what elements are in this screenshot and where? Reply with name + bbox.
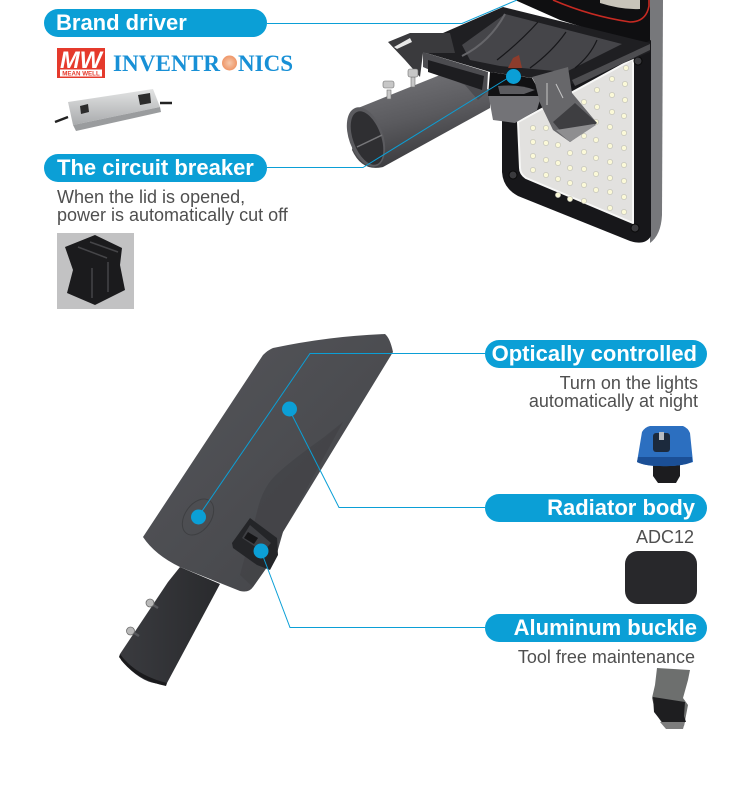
leader: radiator body: [289, 409, 485, 508]
pole mouth: [119, 654, 167, 686]
brand logo: Mean Well: MW: [60, 47, 104, 74]
heading: Brand driver: Brand driver: [56, 10, 187, 35]
open lid: [423, 7, 650, 84]
breaker box: [488, 93, 542, 123]
text: circuit breaker description: [57, 187, 288, 225]
leader: circuit breaker: [267, 78, 508, 168]
pole: [120, 567, 220, 684]
text: circuit breaker description: power is automatically cut off: [57, 205, 288, 225]
text: aluminum buckle description: Tool free maintenance: [518, 647, 695, 667]
ADC12 material swatch: [625, 551, 697, 604]
buckle icon: [652, 668, 690, 729]
brand logo: Inventronics: NICS: [238, 51, 293, 76]
lid lower rim: [572, 44, 650, 86]
LED panel: [518, 59, 633, 223]
lid ties: [462, 14, 597, 68]
heading: Aluminum buckle: Aluminum buckle: [514, 615, 697, 640]
marker dot: body: [282, 402, 297, 416]
marker dot: buckle: [254, 544, 268, 558]
heading: The circuit breaker: The circuit breaker: [57, 155, 254, 180]
text: ADC12: ADC12: [636, 527, 694, 547]
text: optically controlled description: automatically at night: [529, 391, 698, 411]
pipe mouth: [339, 102, 393, 172]
pole bolts: [126, 599, 158, 636]
open lamp photo: [267, 0, 663, 243]
lid interior: [462, 14, 622, 72]
pole lamp back view: [119, 334, 393, 686]
brand logo: Inventronics: [113, 51, 293, 76]
red wire and driver: [553, 0, 649, 22]
buckle on lamp: [232, 518, 278, 570]
body crease shading: [240, 422, 343, 587]
heading: Optically controlled: Optically controlled: [492, 341, 697, 366]
text: optically controlled description: [529, 373, 698, 411]
photocell icon: [637, 426, 693, 483]
driver photo: [55, 89, 172, 131]
heading: Radiator body: [485, 494, 707, 522]
sensor recess: [176, 493, 220, 541]
text: circuit breaker description: When the lid is opened,: [57, 187, 245, 207]
heading: Radiator body: Radiator body: [547, 495, 695, 520]
lamp black frame: [502, 40, 651, 243]
marker dot: [506, 69, 521, 84]
upper black compartment: [515, 0, 650, 48]
text: optically controlled description: Turn on the lights: [560, 373, 698, 393]
leader: optically controlled: [198, 354, 485, 517]
buckle: [532, 67, 597, 142]
marker dot: sensor: [191, 510, 206, 524]
lamp housing side strip: [650, 0, 663, 243]
heading: Brand driver: [44, 9, 267, 37]
brand logo: Mean Well: MEAN WELL: [62, 70, 100, 78]
bolts: [383, 69, 418, 99]
frame screws: [509, 57, 642, 232]
breaker photo: [57, 233, 134, 309]
leader: brand driver: [267, 0, 517, 24]
lamp body: [143, 334, 393, 592]
bracket plate: [388, 33, 455, 77]
pole clamp pipe: [352, 75, 490, 168]
brand logo: Inventronics: INVENTR: [113, 51, 220, 76]
arm hinge: [423, 52, 488, 100]
leader: aluminum buckle: [261, 551, 485, 628]
